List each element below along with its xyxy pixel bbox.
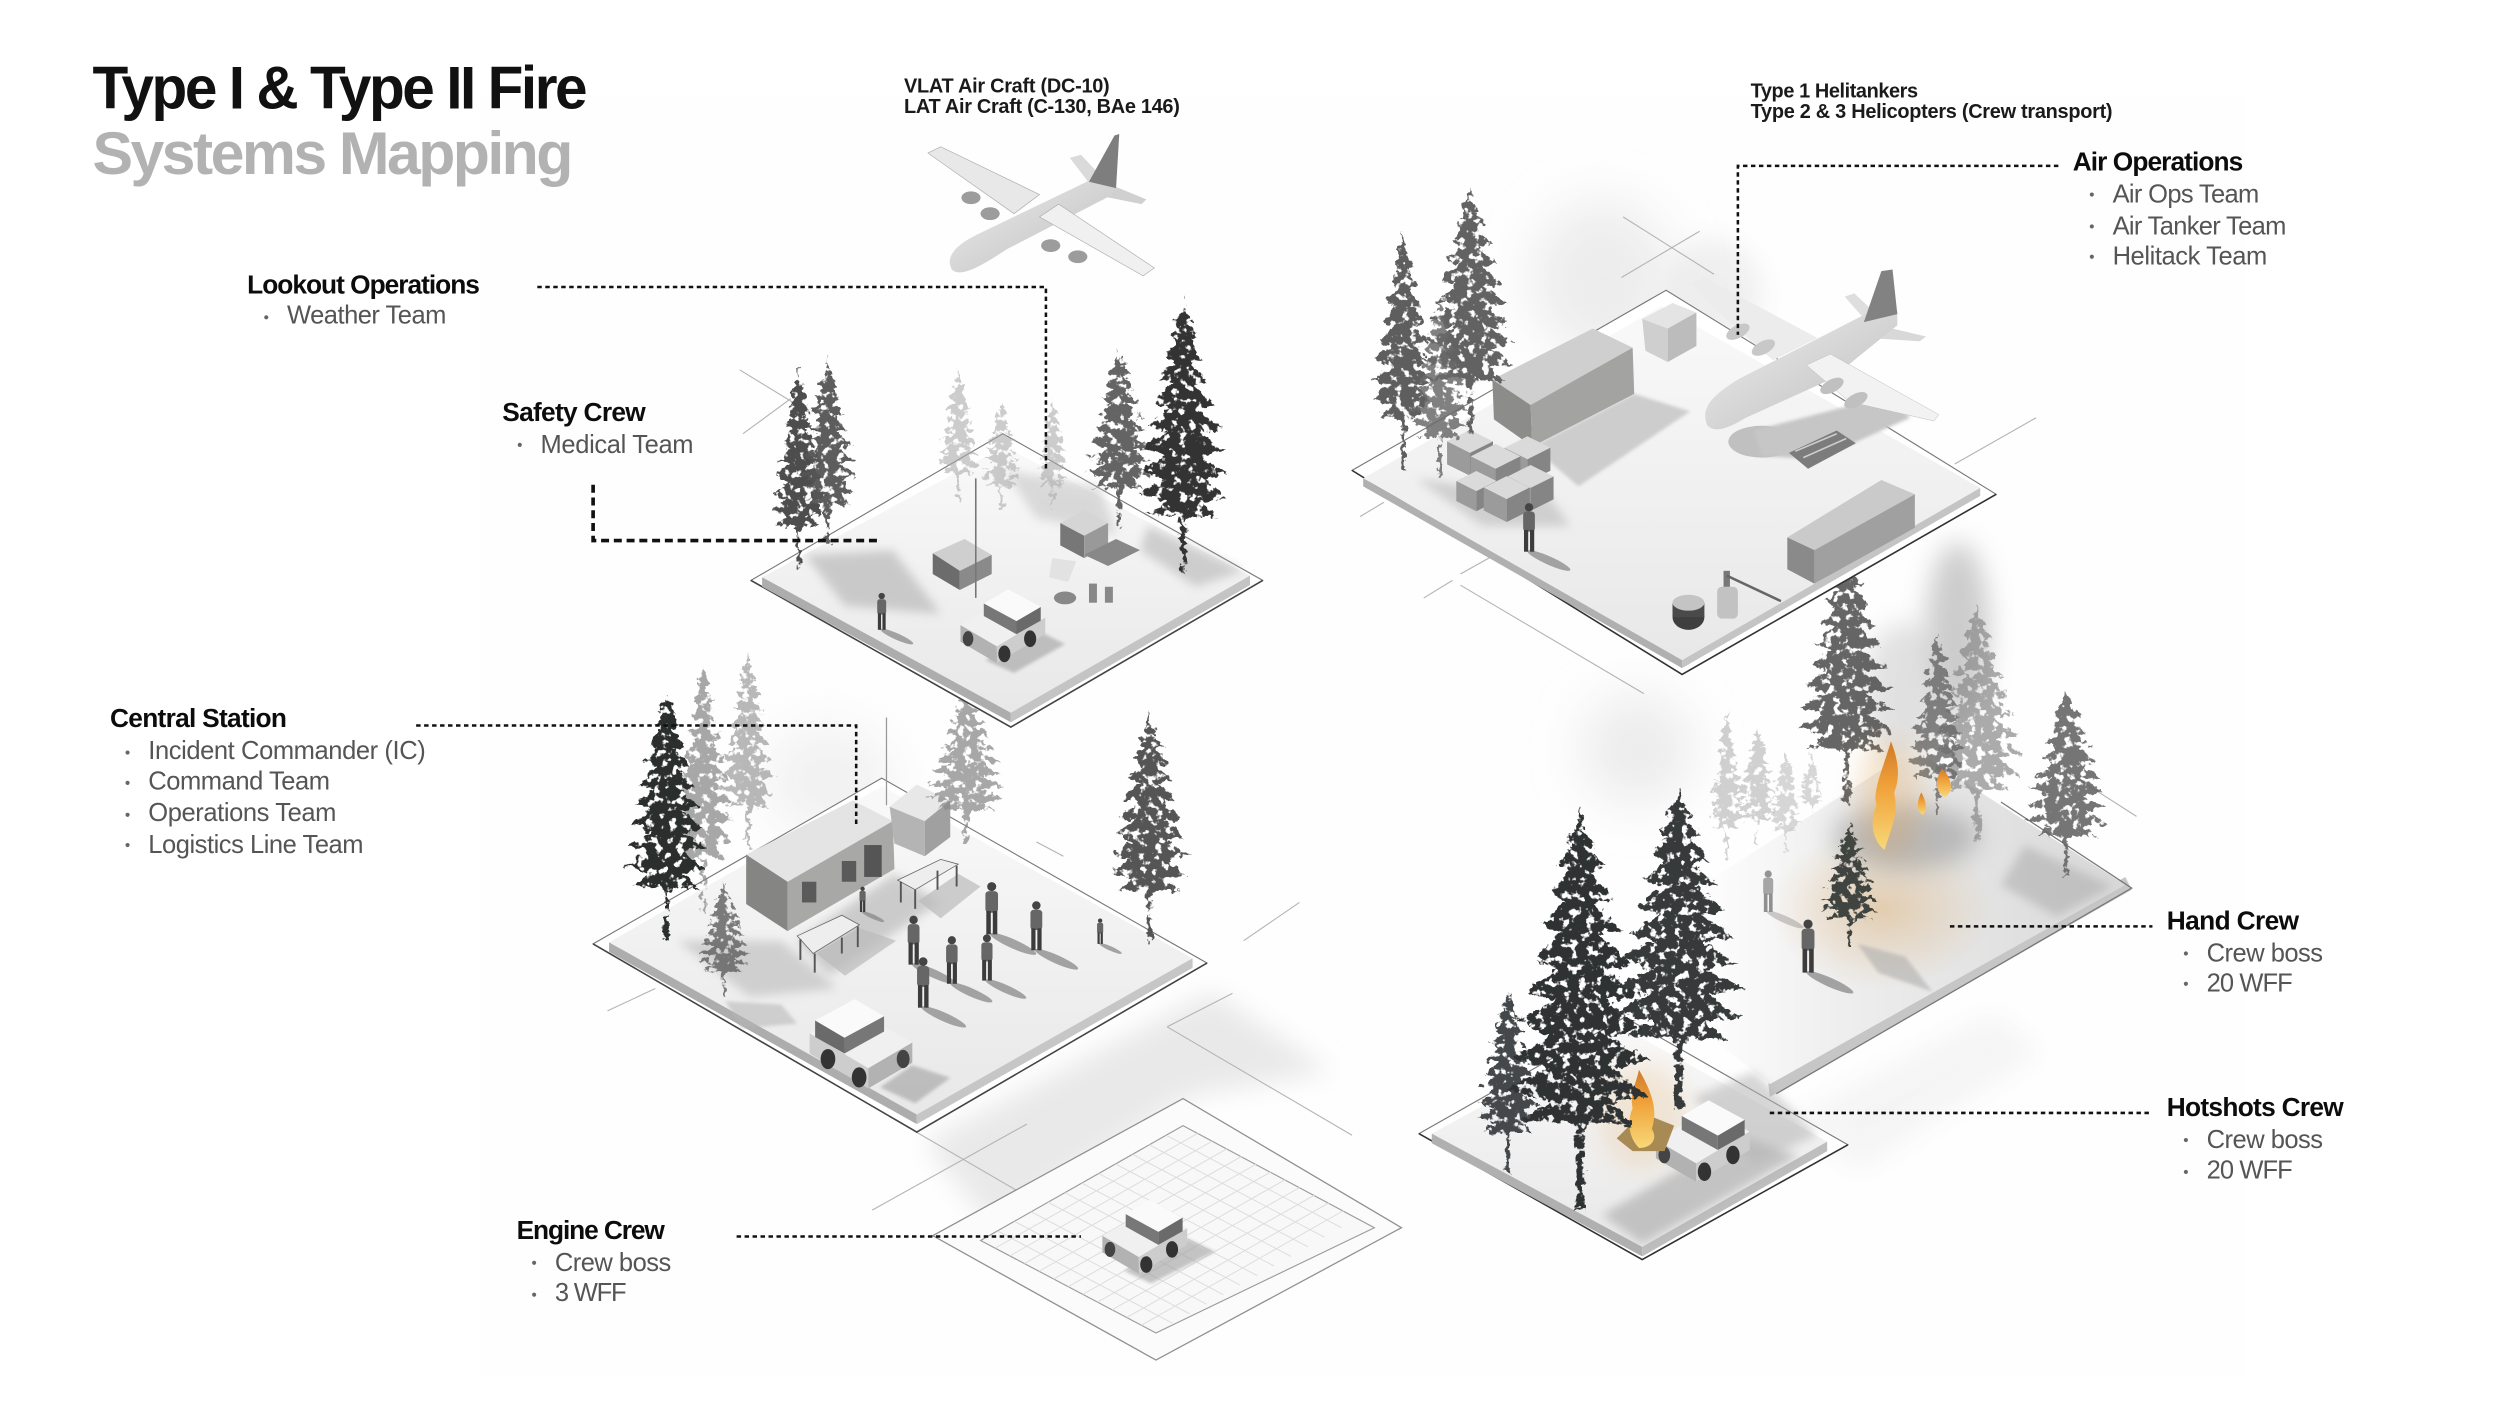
label: engine crew: 3 WFF [555, 1279, 627, 1307]
panel: engine crew ground grid [933, 1099, 1401, 1360]
label: hotshots crew: Crew boss [2207, 1126, 2323, 1154]
panel: central station platform [593, 718, 1207, 1132]
dashed leader: hand crew [1950, 925, 2152, 927]
label: central station: Incident Commander (IC) [148, 737, 426, 765]
icon: storage container [1787, 480, 1915, 584]
trees: hotshots [1476, 786, 1745, 1210]
panel: air operations platform [1352, 269, 1996, 674]
label: air operations: Air Operations [2073, 147, 2243, 177]
label: lookout operations: Weather Team [287, 302, 446, 330]
label: lookout operations [247, 269, 480, 330]
background panel [482, 96, 2245, 1374]
icon: lookout equipment [1049, 558, 1113, 604]
label: hand crew: Crew boss [2207, 939, 2323, 967]
label: air operations: Air Tanker Team [2113, 212, 2286, 240]
icon: air ops plane on ground [1692, 269, 1939, 469]
label: hand crew [2167, 906, 2323, 998]
icon: crew group [859, 882, 1123, 1031]
label: central station: Command Team [148, 767, 330, 795]
icon: logs [1789, 431, 1856, 469]
dashed leader: lookout [537, 287, 1046, 472]
label: engine crew [517, 1215, 671, 1307]
icon: tables [797, 859, 981, 976]
label: hand crew: 20 WFF [2207, 970, 2293, 998]
label: central station [110, 703, 426, 859]
icon: supply crates [1447, 430, 1554, 522]
trees: lookout [772, 297, 1228, 577]
icon: generator and radio unit [933, 478, 992, 598]
icon: fuel barrels [1673, 571, 1781, 630]
label: safety crew: Medical Team [540, 431, 694, 459]
panel: lookout platform [751, 434, 1263, 727]
label: hand crew: Hand Crew [2167, 906, 2300, 936]
icon: SUV [810, 999, 950, 1103]
title: Type I & Type II Fire [92, 53, 586, 121]
dashed leader: safety [593, 485, 882, 541]
label: safety crew: Safety Crew [502, 397, 646, 427]
icon: hand crew firefighters [1763, 870, 1855, 997]
icon: hand crew flames [1857, 740, 1951, 855]
aircraft note: helicopters [1751, 80, 2113, 123]
dashed leader: hotshots [1770, 1112, 2152, 1114]
label: hotshots crew [2167, 1092, 2344, 1184]
aircraft note: helicopters: Type 2 & 3 Helicopters (Crew transport) [1751, 101, 2113, 123]
icon: command container [1492, 328, 1634, 446]
panel: hotshots platform [1419, 1017, 1848, 1260]
aircraft note: fixed wing [904, 76, 1180, 118]
trees: hand crew [1709, 547, 2108, 946]
icon: person [1523, 503, 1572, 574]
trees: air operations [1371, 188, 1515, 477]
label: central station: Central Station [110, 703, 287, 733]
dashed leader: air ops [1738, 166, 2058, 335]
trees: central station [626, 651, 1189, 997]
label: air operations: Air Ops Team [2113, 181, 2259, 209]
title [92, 53, 586, 187]
panel: hand crew platform [1690, 749, 2132, 1097]
icon: lookout pickup [960, 589, 1065, 673]
icon: hotshots truck [1656, 1100, 1750, 1182]
icon: engine crew truck [1102, 1200, 1215, 1284]
smoke and soft shadows [765, 199, 2041, 1228]
icon: command trailer [746, 800, 894, 931]
label: engine crew: Engine Crew [517, 1215, 665, 1245]
icon: person [877, 593, 914, 647]
title: Systems Mapping [92, 119, 571, 187]
aircraft note: fixed wing: LAT Air Craft (C-130, BAe 146) [904, 96, 1180, 118]
label: central station: Logistics Line Team [148, 831, 364, 859]
label: engine crew: Crew boss [555, 1249, 671, 1277]
dashed leader: engine [737, 1235, 1081, 1237]
guide lines [607, 217, 2136, 1210]
label: lookout operations: Lookout Operations [247, 269, 480, 299]
label: air operations [2073, 147, 2286, 271]
icon: small shed [1642, 303, 1696, 362]
aircraft note: helicopters: Type 1 Helitankers [1751, 80, 1918, 102]
icon: radio shed [886, 718, 950, 856]
icon: lookout shed [1060, 510, 1140, 566]
label: central station: Operations Team [148, 799, 336, 827]
dashed leader: central [416, 725, 856, 824]
label: safety crew [502, 397, 694, 459]
icon: hotshots flames [1617, 1070, 1674, 1151]
label: hotshots crew: Hotshots Crew [2167, 1092, 2344, 1122]
aircraft note: fixed wing: VLAT Air Craft (DC-10) [904, 76, 1110, 98]
label: hotshots crew: 20 WFF [2207, 1156, 2293, 1184]
label: air operations: Helitack Team [2113, 243, 2267, 271]
icon: VLAT plane [928, 134, 1154, 276]
